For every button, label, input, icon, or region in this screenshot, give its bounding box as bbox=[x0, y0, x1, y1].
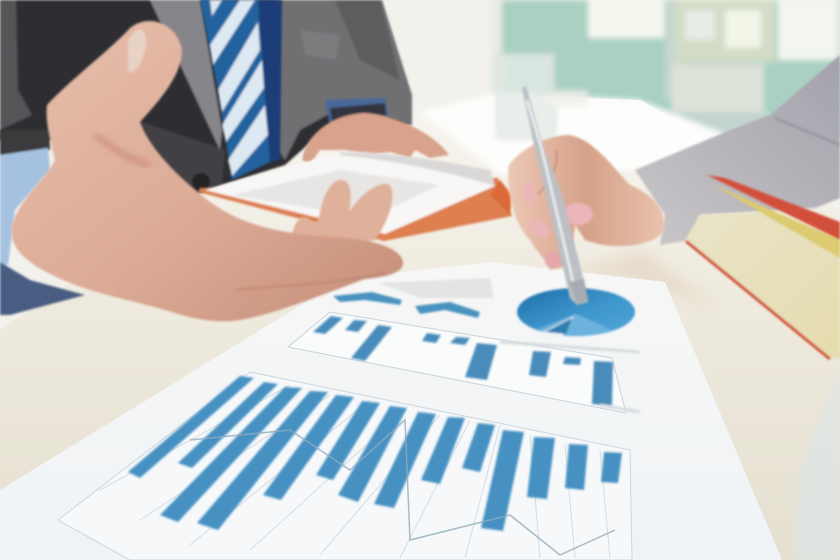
lower chart bbox=[58, 372, 632, 560]
far hand on notebook bbox=[302, 98, 449, 164]
foreground glass bbox=[795, 370, 840, 560]
right book bbox=[685, 175, 840, 359]
left shirt cuff and sleeve bbox=[0, 130, 85, 315]
report sheet bbox=[0, 262, 782, 560]
upper chart bbox=[288, 312, 626, 413]
silver pen bbox=[522, 86, 588, 305]
window view bbox=[490, 0, 840, 136]
water glass bbox=[497, 53, 588, 138]
writing hand bbox=[508, 135, 664, 270]
suit jacket bbox=[0, 0, 412, 195]
necktie bbox=[200, 0, 282, 180]
pie chart bbox=[517, 288, 635, 338]
open notebook bbox=[198, 152, 512, 241]
gesturing hand bbox=[12, 21, 403, 321]
header labels bbox=[333, 278, 640, 412]
paper shadow bbox=[520, 250, 720, 310]
right sleeve bbox=[635, 55, 840, 245]
